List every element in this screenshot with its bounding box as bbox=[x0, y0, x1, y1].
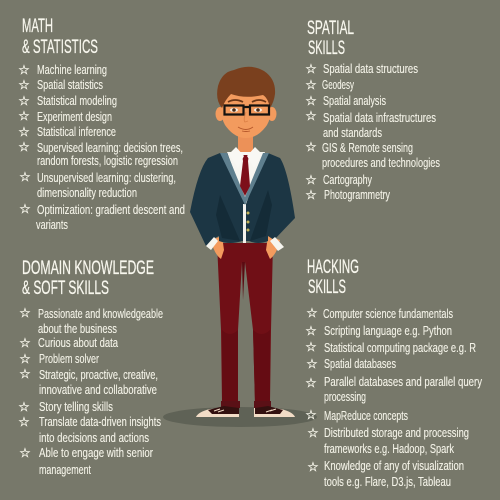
tie bbox=[240, 155, 250, 196]
eyebrows bbox=[228, 100, 266, 102]
list: math skills: random forests, logistic regression bbox=[37, 153, 178, 168]
list: math skills: Spatial statistics bbox=[37, 77, 103, 92]
list: math skills: variants bbox=[36, 217, 68, 232]
face bbox=[221, 92, 271, 138]
heading: domain knowledge: DOMAIN KNOWLEDGE bbox=[22, 258, 154, 279]
right cuff bbox=[270, 237, 284, 251]
left cuff bbox=[206, 237, 218, 250]
list: math skills: Experiment design bbox=[37, 109, 112, 124]
heading: spatial skills bbox=[307, 18, 354, 59]
right hand bbox=[266, 236, 280, 259]
heading: hacking skills: HACKING bbox=[307, 257, 359, 278]
bullet stars: domain: ☆ bbox=[19, 366, 31, 381]
bullet stars: hacking: ☆ bbox=[307, 425, 319, 440]
list: spatial skills: Cartography bbox=[323, 172, 372, 187]
bullet stars: math bbox=[18, 62, 31, 216]
list: domain skills: Curious about data bbox=[38, 335, 119, 350]
bullet stars: domain bbox=[18, 305, 31, 460]
buttons bbox=[246, 212, 250, 232]
list: domain skills: Strategic, proactive, creative, bbox=[39, 367, 158, 382]
list: math skills: Statistical inference bbox=[37, 124, 116, 139]
list: spatial skills: Spatial data infrastructures bbox=[323, 110, 436, 125]
bullet stars: spatial: ☆ bbox=[305, 61, 317, 76]
bullet stars: hacking: ☆ bbox=[306, 356, 318, 371]
white shirt front bbox=[227, 152, 265, 204]
list: spatial skills: Spatial data structures bbox=[323, 61, 418, 76]
list: spatial skills: and standards bbox=[323, 125, 382, 140]
bullet stars: domain: ☆ bbox=[19, 445, 31, 460]
heading: hacking skills: SKILLS bbox=[308, 277, 346, 298]
bullet stars: hacking: ☆ bbox=[305, 339, 317, 354]
heading: math and statistics: & STATISTICS bbox=[22, 37, 98, 58]
list: spatial skills: Photogrammetry bbox=[324, 187, 390, 202]
left hand bbox=[211, 236, 224, 259]
list: spatial skills: Spatial analysis bbox=[323, 93, 386, 108]
bullet stars: math: ☆ bbox=[18, 108, 30, 123]
ears bbox=[216, 107, 224, 121]
bullet stars: domain: ☆ bbox=[18, 399, 30, 414]
bullet stars: hacking: ☆ bbox=[306, 305, 318, 320]
shirt strip bbox=[243, 204, 246, 243]
list: domain skills: into decisions and actions bbox=[39, 430, 149, 445]
bullet stars: domain: ☆ bbox=[18, 414, 30, 429]
bullet stars: hacking bbox=[305, 305, 319, 474]
mouth bbox=[238, 127, 253, 132]
eyes bbox=[230, 108, 238, 112]
bullet stars: spatial: ☆ bbox=[305, 93, 317, 108]
lapels bbox=[220, 153, 269, 205]
bullet stars: hacking: ☆ bbox=[305, 375, 317, 390]
list: hacking skills: Spatial databases bbox=[324, 356, 396, 371]
list: spatial skills bbox=[322, 61, 440, 202]
bullet stars: math: ☆ bbox=[18, 93, 30, 108]
left shoe bbox=[196, 401, 240, 417]
heading: math and statistics bbox=[22, 16, 98, 58]
bullet stars: domain: ☆ bbox=[19, 305, 31, 320]
bullet stars: spatial: ☆ bbox=[305, 187, 317, 202]
right shoe bbox=[254, 401, 295, 417]
bullet stars: spatial: ☆ bbox=[305, 139, 317, 154]
list: domain skills: Story telling skills bbox=[39, 399, 113, 414]
heading: domain knowledge bbox=[22, 258, 154, 299]
bullet stars: math: ☆ bbox=[18, 77, 30, 92]
list: domain skills bbox=[38, 306, 163, 477]
bullet stars: hacking: ☆ bbox=[307, 459, 319, 474]
heading: spatial skills: SKILLS bbox=[308, 38, 345, 59]
list: domain skills: about the business bbox=[38, 321, 117, 336]
bullet stars: math: ☆ bbox=[18, 139, 30, 154]
list: domain skills: management bbox=[39, 462, 91, 477]
list: hacking skills: MapReduce concepts bbox=[324, 408, 408, 423]
list: math skills: dimensionality reduction bbox=[37, 185, 137, 200]
bullet stars: spatial bbox=[305, 61, 317, 202]
list: hacking skills: Scripting language e.g. Python bbox=[324, 323, 452, 338]
bullet stars: math: ☆ bbox=[19, 169, 31, 184]
list: spatial skills: procedures and technologies bbox=[322, 155, 440, 170]
list: domain skills: Translate data-driven insights bbox=[39, 414, 161, 429]
bullet stars: hacking: ☆ bbox=[305, 407, 317, 422]
panel: hacking skills bbox=[305, 257, 482, 489]
list: spatial skills: Geodesy bbox=[322, 77, 354, 92]
list: math skills bbox=[36, 62, 185, 232]
heading: spatial skills: SPATIAL bbox=[307, 18, 354, 39]
head bbox=[216, 67, 276, 138]
list: domain skills: Passionate and knowledgeable bbox=[38, 306, 163, 321]
bullet stars: math: ☆ bbox=[18, 124, 30, 139]
list: math skills: Statistical modeling bbox=[37, 93, 117, 108]
heading: hacking skills bbox=[307, 257, 359, 298]
hair bbox=[217, 67, 275, 108]
heading: domain knowledge: & SOFT SKILLS bbox=[22, 278, 109, 299]
list: domain skills: Able to engage with senior bbox=[39, 445, 153, 460]
collar bbox=[229, 147, 262, 168]
list: math skills: Machine learning bbox=[37, 62, 107, 77]
bullet stars: spatial: ☆ bbox=[305, 172, 317, 187]
panel: math and statistics bbox=[18, 16, 185, 232]
bullet stars: math: ☆ bbox=[18, 62, 30, 77]
panel: spatial skills bbox=[305, 18, 440, 202]
bullet stars: spatial: ☆ bbox=[305, 108, 317, 123]
list: domain skills: innovative and collaborative bbox=[39, 382, 157, 397]
panel: domain knowledge and soft skills bbox=[18, 258, 163, 477]
illustration: man in blazer bbox=[190, 67, 295, 417]
bullet stars: spatial: ☆ bbox=[305, 77, 317, 92]
list: math skills: Supervised learning: decision trees, bbox=[37, 140, 183, 155]
bullet stars: hacking: ☆ bbox=[305, 323, 317, 338]
list: math skills: Unsupervised learning: clustering, bbox=[37, 170, 176, 185]
neck bbox=[238, 130, 253, 165]
list: hacking skills: tools e.g. Flare, D3.js, Tableau bbox=[324, 474, 451, 489]
ground shadow bbox=[163, 407, 317, 427]
list: hacking skills bbox=[323, 306, 482, 489]
glasses bbox=[224, 106, 269, 114]
trousers bbox=[217, 243, 273, 403]
bullet stars: math: ☆ bbox=[19, 201, 31, 216]
list: hacking skills: processing bbox=[324, 389, 366, 404]
nose bbox=[244, 112, 248, 122]
list: math skills: Optimization: gradient descent and bbox=[37, 202, 185, 217]
blazer bbox=[190, 147, 295, 251]
bullet stars: domain: ☆ bbox=[19, 351, 31, 366]
list: spatial skills: GIS & Remote sensing bbox=[322, 140, 413, 155]
list: domain skills: Problem solver bbox=[39, 351, 99, 366]
bullet stars: domain: ☆ bbox=[19, 335, 31, 350]
heading: math and statistics: MATH bbox=[22, 16, 53, 37]
